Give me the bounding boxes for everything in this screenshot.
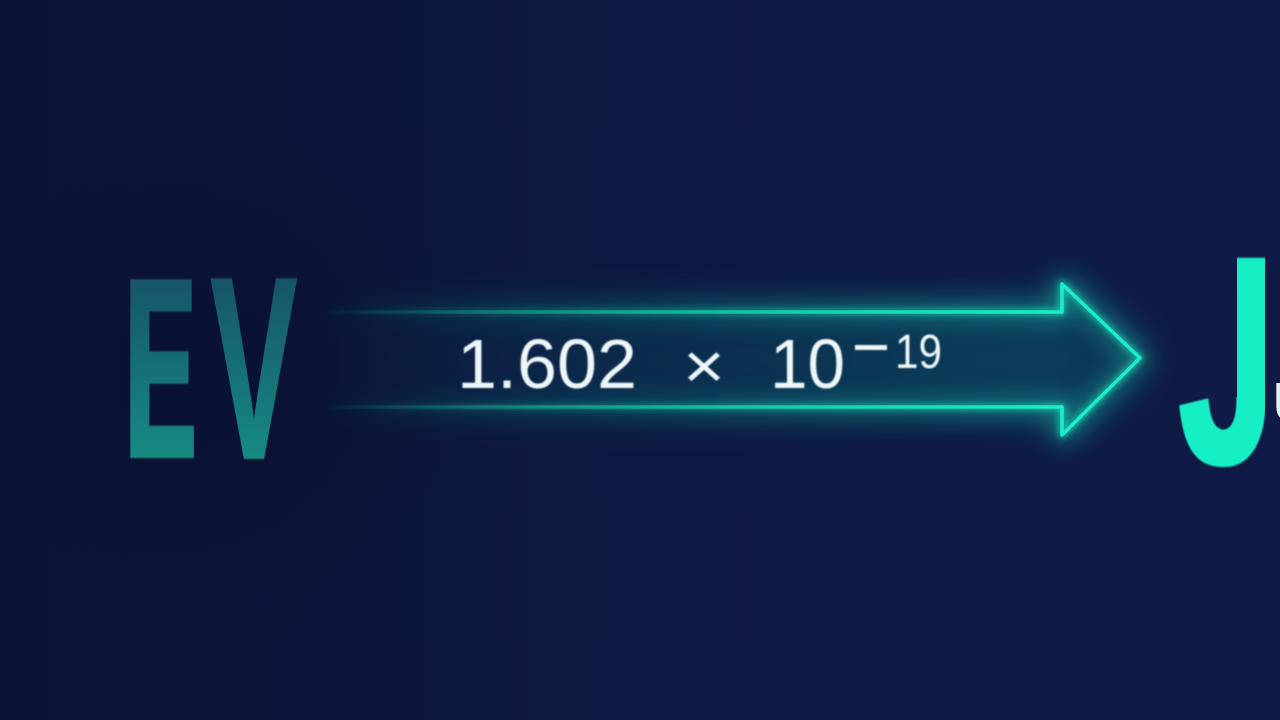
label: EV	[125, 226, 297, 513]
formula: 1.602 × 10^-19	[457, 325, 942, 403]
label: EV: E	[125, 228, 196, 511]
formula: 1.602 × 10^-19: 1.602	[457, 325, 637, 403]
formula: 1.602 × 10^-19: 10	[770, 325, 845, 403]
label: EV: V	[211, 226, 297, 513]
formula: 1.602 × 10^-19: 19	[895, 326, 942, 379]
arrow: neon outline pointing right	[320, 284, 1140, 435]
label: J: J	[1179, 198, 1275, 525]
infographic: electronvolt to joule conversion	[0, 159, 1280, 580]
formula: 1.602 × 10^-19: ×	[683, 330, 725, 402]
